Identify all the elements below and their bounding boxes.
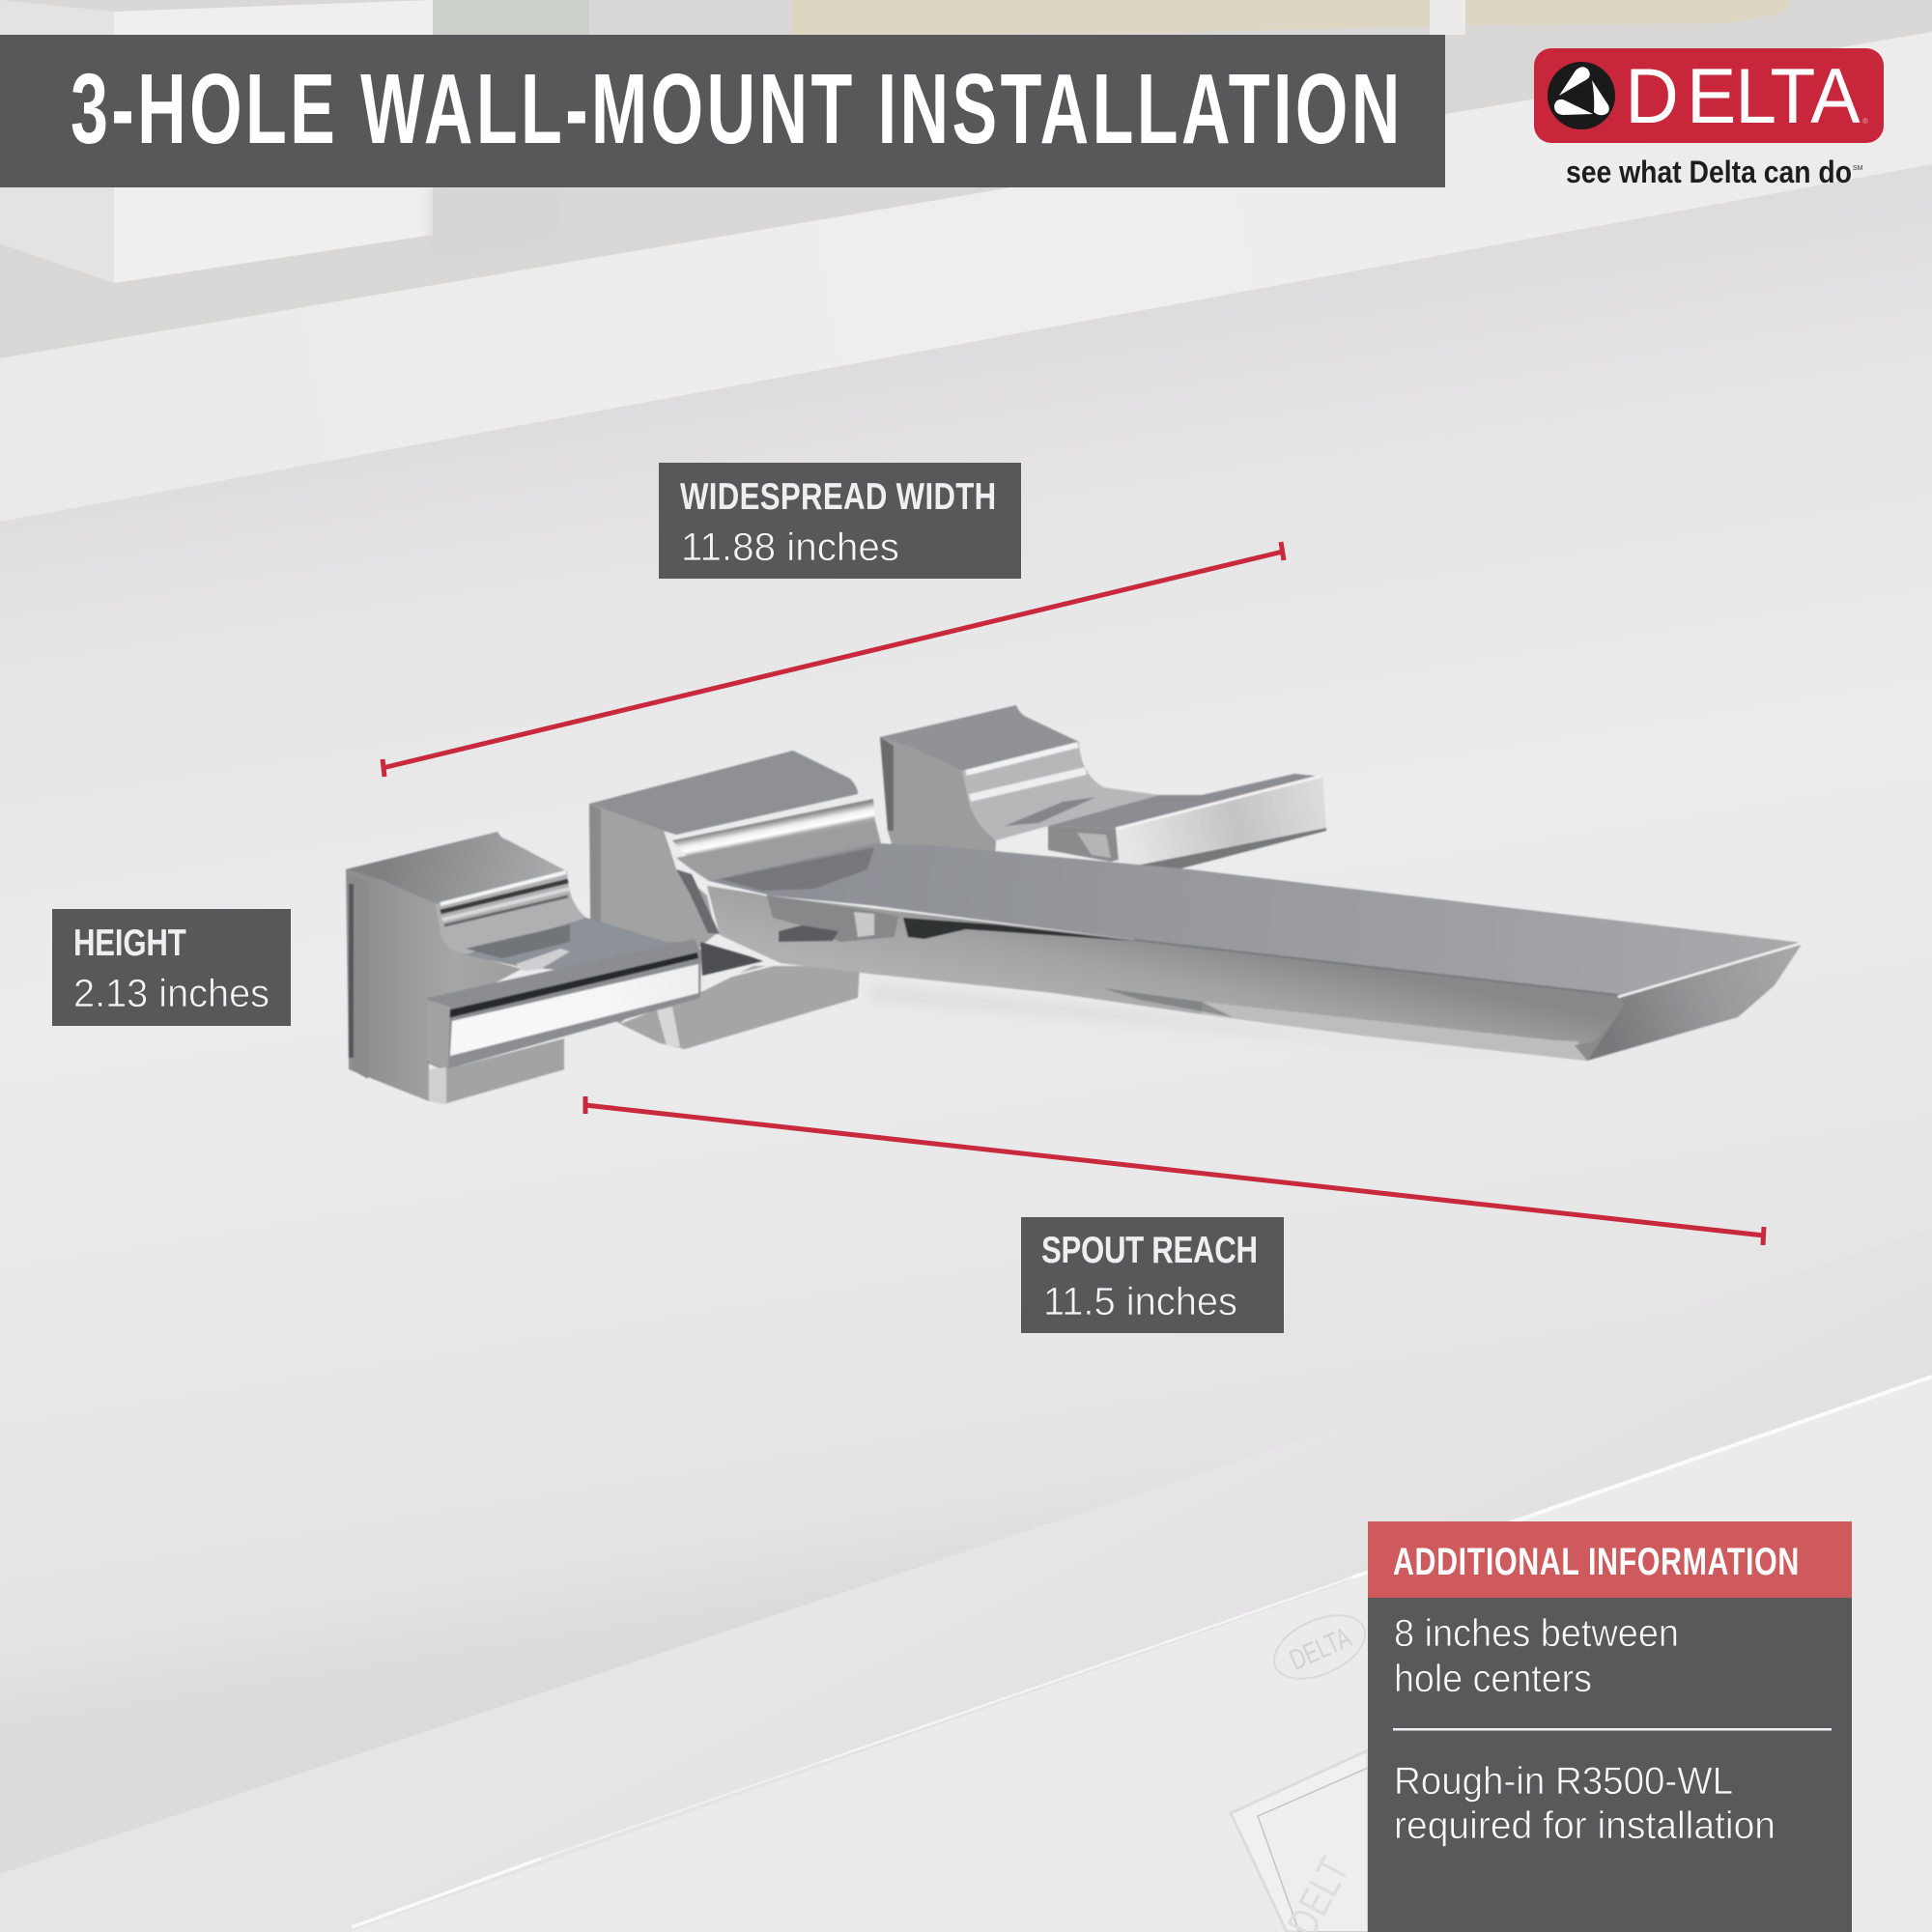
registered mark: ® [1862,117,1868,126]
under-spout chrome reflections [767,895,898,942]
panel header: ADDITIONAL INFORMATION [1393,1540,1799,1583]
tub overflow plate [1231,1750,1368,1932]
centre escutcheon [589,751,881,1049]
label: spout reach: SPOUT REACH [1041,1230,1258,1271]
hole centers note: hole centers [1394,1658,1592,1700]
spout tip face [1587,943,1803,1061]
rough-in note: Rough-in R3500-WL [1394,1760,1733,1803]
title bar [0,35,1445,187]
glass jar on shelf [433,0,589,35]
service mark: SM [1853,165,1863,172]
tagline: see what Delta can do [1566,155,1852,189]
right handle escutcheon and lever [880,705,1326,869]
label: spout reach: 11.5 inches [1043,1279,1237,1323]
Delta logo [1534,48,1884,189]
spout underside [1202,1002,1587,1061]
label: widespread width: 11.88 inches [681,525,899,569]
panel: additional information [1368,1521,1852,1932]
logo mark [1548,62,1615,129]
tub deck [348,1377,1932,1932]
white box on shelf [0,0,433,283]
spout [707,843,1803,1061]
tub badge: Delta oval [1264,1603,1375,1691]
label: height: 2.13 inches [73,971,270,1015]
reflection on spout top [720,847,874,891]
dimension line: spout reach [585,1096,1764,1245]
back shelf surface [0,0,1932,358]
tub badge: Delta oval: DELTA [1285,1622,1356,1677]
label: widespread width [659,463,1021,579]
natural sponge on shelf [792,0,1792,35]
white ledge [0,32,1932,522]
label: height: HEIGHT [73,923,186,964]
spout shadow [869,985,1584,1067]
rough-in note [1394,1760,1776,1847]
wordmark: DELTA [1625,51,1861,139]
small white container [1430,0,1465,35]
tub rim band [0,1229,1932,1932]
rough-in note: required for installation [1394,1804,1776,1847]
left handle escutcheon and lever [346,832,701,1104]
label: widespread width: WIDESPREAD WIDTH [680,476,996,518]
spout front face [707,886,1624,1061]
spout top surface [709,843,1803,995]
hole centers note [1394,1612,1679,1700]
dimension line: widespread width [383,542,1284,777]
panel body [1368,1598,1852,1932]
hole centers note: 8 inches between [1394,1612,1679,1655]
jar reflection [433,184,555,261]
title: 3-HOLE WALL-MOUNT INSTALLATION [71,52,1400,164]
label: height [52,909,291,1026]
label: spout reach [1021,1217,1284,1333]
panel header [1368,1521,1852,1598]
faucet photo illustration [346,705,1803,1104]
bright tub edge highlight [352,1377,1932,1927]
